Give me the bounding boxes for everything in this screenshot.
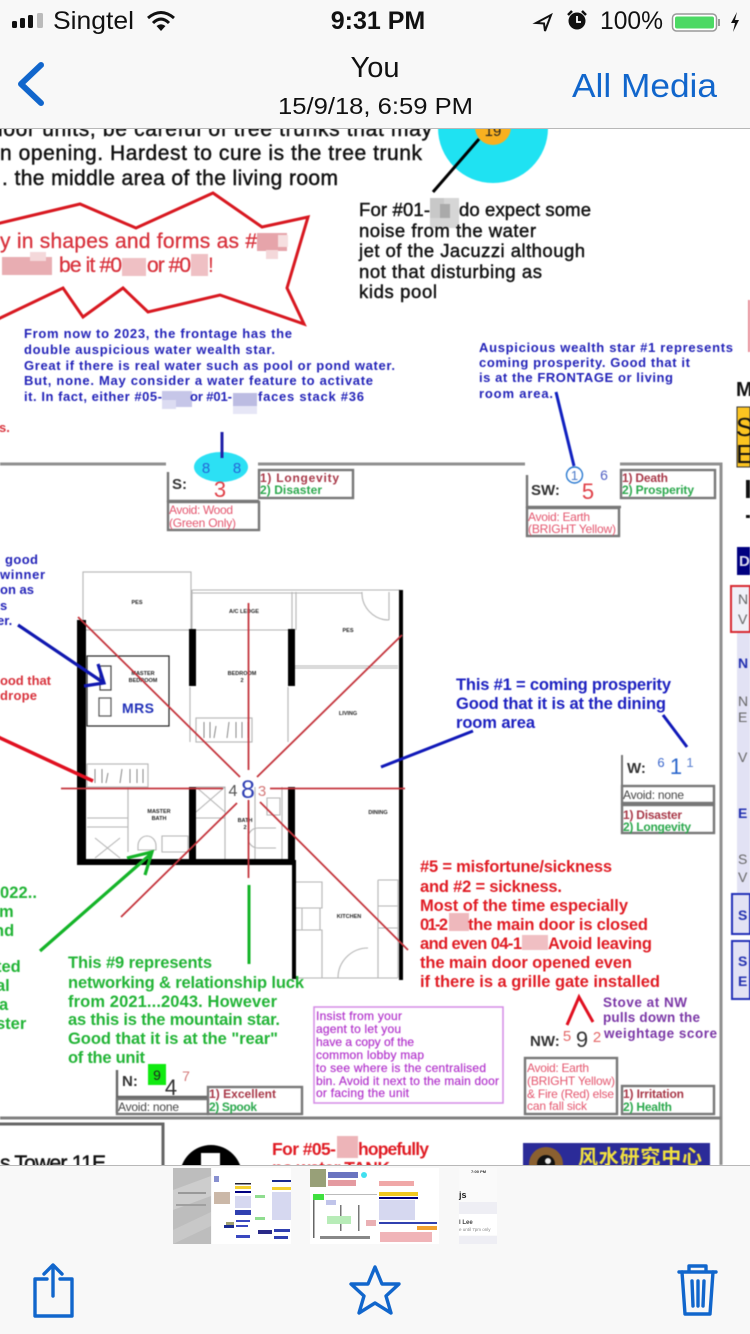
arrow: wealth star pointer: [556, 392, 574, 466]
room labels: [129, 600, 388, 920]
callout: red star burst: or #0: [147, 254, 191, 277]
thumbnail: current floor plan page: [310, 1168, 439, 1244]
arrow: red to wardrobe: [0, 737, 93, 781]
text block: stove note: pulls down the: [603, 1010, 700, 1025]
text block: mountain star note: This #9 represents: [68, 954, 212, 972]
panel: west star box: [622, 754, 714, 834]
text block: mountain star note: as this is the mountain star.: [68, 1011, 280, 1029]
panel: north star box: N:: [122, 1073, 138, 1090]
panel: west star box: 1) Disaster: [623, 808, 682, 822]
status: carrier: Singtel: [53, 7, 134, 35]
text block: auspicious wealth star: is at the FRONTAGE or living: [479, 370, 673, 385]
text block: jacuzzi note: jet of the Jacuzzi although: [358, 240, 585, 261]
thumbnail: message list: js: [458, 1190, 467, 1200]
callout: purple lobby map note: or facing the unit: [316, 1086, 410, 1100]
text block: auspicious wealth star: [479, 340, 733, 401]
nav date: 15/9/18, 6:59 PM: [278, 93, 473, 119]
thumbnail: message list: l Lee: [459, 1220, 473, 1226]
panel: south star box: 2) Disaster: [260, 483, 322, 497]
centre star numbers: 4: [229, 783, 238, 800]
room labels: BATH: [238, 818, 252, 824]
panel: north-west star box: NW:: [530, 1033, 560, 1050]
text block: mountain star note: networking & relationship luck: [68, 974, 305, 992]
room labels: PES: [131, 600, 143, 606]
panel: south star box: 3: [214, 477, 226, 502]
callout: purple lobby map note: common lobby map: [316, 1048, 424, 1062]
panel: clipped right column: V: [738, 869, 748, 885]
text block: frontage water star: From now to 2023, the frontage has the: [24, 326, 292, 341]
thumbnail: blurry photo: [173, 1168, 211, 1244]
text block: stove note: weightage score: [603, 1026, 717, 1041]
panel: west star box: Avoid: none: [623, 788, 684, 802]
panel: clipped right column: N: [738, 693, 748, 709]
panel: south-west star box: 1) Death: [622, 471, 668, 485]
text block: mountain star note: [68, 954, 305, 1067]
panel: clipped right column: N: [738, 655, 748, 671]
room labels: MASTER: [147, 809, 171, 815]
room labels: A/C LEDGE: [229, 609, 259, 615]
text block: misfortune warning: if there is a grille gate installed: [420, 973, 660, 991]
panel: north star box: 1) Excellent: [209, 1087, 276, 1101]
banner: feng shui research centre: 风水研究中心: [578, 1145, 702, 1169]
text block: stove note: [603, 995, 717, 1041]
room labels: BEDROOM: [129, 678, 158, 684]
panel: south-west star box: Avoid: Earth: [528, 510, 590, 524]
panel: north-west star box: 9: [576, 1027, 588, 1052]
text block: frontage water star: [24, 326, 395, 414]
text block: frontage water star: But, none. May consider a water feature to activate: [24, 373, 373, 388]
text fragments: left red note: ood that: [0, 673, 52, 688]
centre star numbers: 3: [258, 783, 266, 800]
icon: jacuzzi water circle: [433, 73, 548, 192]
panel: north-west star box: [525, 1027, 714, 1114]
panel: south star box: 1) Longevity: [260, 471, 339, 485]
panel: tower caption box: s Tower 11E: [0, 1152, 106, 1175]
panel: north-west star box: Avoid: Earth: [527, 1061, 589, 1075]
top navigation bar: [0, 0, 750, 129]
callout: purple lobby map note: have a copy of the: [316, 1035, 414, 1049]
icon: favourite star: [351, 1267, 399, 1313]
room labels: BATH: [152, 816, 166, 822]
room labels: 2: [240, 678, 244, 684]
text block: auspicious wealth star: room area.: [479, 386, 553, 401]
plan outlines: [83, 572, 400, 978]
text block: jacuzzi note: For #01-: [359, 199, 430, 220]
panel: south star box: (Green Only): [169, 516, 236, 530]
arrows: blue dining pointers: [381, 715, 687, 767]
floor plan frame: [0, 464, 721, 1165]
panel: south-west star box: 2) Prosperity: [622, 483, 694, 497]
banner: feng shui research centre: [523, 1143, 710, 1181]
panel: west star box: 2) Longevity: [623, 820, 691, 834]
panel: clipped right column: E: [738, 805, 747, 821]
text block: water tank note: For #05-: [272, 1139, 336, 1159]
panel: tower caption box: [0, 1124, 163, 1175]
room labels: LIVING: [339, 711, 357, 717]
red sector lines: [61, 603, 408, 950]
text fragments: left blue note: winner: [0, 567, 45, 582]
text block: misfortune warning: and even 04-1: [420, 935, 522, 953]
callout: red star burst: !: [208, 254, 214, 277]
callout: red star burst: be it #0: [59, 254, 122, 277]
text block: misfortune warning: Most of the time especially: [420, 897, 629, 915]
text block: misfortune warning: the main door is closed: [468, 916, 648, 934]
master bedroom marker: [87, 656, 169, 726]
text block: misfortune warning: #5 = misfortune/sickness: [420, 858, 612, 876]
text block: water tank note: [272, 1136, 429, 1178]
arrow: red caret: [567, 997, 593, 1025]
nav action: All Media: [572, 67, 718, 104]
text block: misfortune warning: Avoid leaving: [548, 935, 652, 953]
arrow: blue to master bed: [18, 625, 104, 686]
text block: jacuzzi note: not that disturbing as: [359, 261, 542, 282]
icon: share: [35, 1265, 72, 1316]
room labels: MASTER: [131, 671, 155, 677]
text block: stove note: Stove at NW: [603, 995, 687, 1010]
text block: frontage water star: faces stack #36: [258, 389, 364, 404]
panel: north-west star box: (BRIGHT Yellow): [527, 1074, 615, 1088]
nav title: You: [351, 52, 399, 84]
panel: clipped right column: S: [738, 907, 747, 923]
icon: trash: [679, 1266, 716, 1314]
text block: auspicious wealth star: Auspicious wealth star #1 represents: [479, 340, 733, 355]
callout: purple lobby map note: to see where is the centralised: [316, 1061, 486, 1075]
centre star numbers: 8: [241, 776, 255, 804]
icon: jacuzzi water circle: 19: [485, 123, 501, 140]
bottom toolbar: [0, 1165, 750, 1334]
callout: purple lobby map note: [314, 1007, 503, 1103]
panel: north-west star box: 1) Irritation: [623, 1087, 684, 1101]
panel: south-west star box: SW:: [531, 482, 560, 499]
panel: clipped right column: S: [738, 851, 747, 867]
panel: north-west star box: can fall sick: [527, 1099, 588, 1113]
text block: frontage water star: or #01-: [190, 389, 232, 404]
text block: auspicious wealth star: coming prosperity. Good that it: [479, 355, 691, 370]
floor plan: [61, 572, 408, 980]
text fragments: left blue note: [0, 552, 45, 628]
text block: mountain star note: of the unit: [68, 1049, 146, 1067]
panel: south-west star box: 6: [600, 467, 608, 483]
panel: clipped right column: V: [738, 749, 748, 765]
panel: south star box: 8: [202, 460, 210, 477]
room labels: DINING: [368, 810, 388, 816]
panel: west star box: 1: [670, 754, 682, 779]
room labels: 2: [243, 825, 247, 831]
panel: clipped right column: E: [738, 709, 747, 725]
text block: mountain star note: Good that it is at the "rear": [68, 1030, 278, 1048]
panel: west star box: 1: [686, 755, 694, 770]
arrow: green vertical line: [248, 885, 250, 964]
text fragments: left red note: [0, 673, 52, 703]
text block: dining prosperity: [456, 676, 672, 732]
text block: dining prosperity: room area: [456, 714, 536, 732]
callout: purple lobby map note: bin. Avoid it next to the main door: [316, 1074, 499, 1088]
text block: top advice: n opening. Hardest to cure is the tree trunk: [0, 142, 422, 165]
text fragments: left green note: [0, 884, 37, 1033]
callout: purple lobby map note: agent to let you: [316, 1022, 401, 1036]
panel: west star box: W:: [627, 760, 646, 777]
text block: water tank note: no water TANK: [272, 1158, 390, 1178]
plan walls: [77, 590, 403, 980]
panel: north star box: [117, 1064, 302, 1114]
panel: north-west star box: 2: [593, 1029, 601, 1046]
panel: south star box: S:: [172, 476, 187, 493]
text block: jacuzzi note: do expect some: [459, 199, 591, 220]
panel: south star box: 8: [233, 460, 241, 477]
panel: clipped right column: D: [739, 553, 750, 570]
status: time: 9:31 PM: [331, 7, 425, 35]
thumbnail: message list: e until 7pm only: [459, 1227, 491, 1232]
panel: south-west star box: 1: [571, 468, 578, 483]
text block: water tank note: hopefully: [358, 1139, 429, 1159]
panel: clipped right column: S: [738, 953, 747, 969]
icon: alarm clock: [568, 11, 586, 30]
text block: top advice: . the middle area of the living room: [2, 167, 338, 190]
room labels: PES: [342, 628, 354, 634]
panel: north star box: Avoid: none: [118, 1100, 179, 1114]
icon: back chevron: [21, 65, 41, 103]
text block: misfortune warning: the main door opened even: [420, 954, 632, 972]
panel: south-west star box: [527, 467, 715, 536]
text block: misfortune warning: [420, 858, 660, 991]
panel: north star box: 4: [165, 1075, 177, 1100]
text block: dining prosperity: Good that it is at the dining: [456, 695, 666, 713]
arrow: green to master bath: [40, 852, 152, 951]
panel: south star box: [168, 432, 353, 530]
panel: south-west star box: (BRIGHT Yellow): [528, 522, 616, 536]
text block: frontage water star: double auspicious water wealth star.: [24, 342, 275, 357]
text block: frontage water star: Great if there is real water such as pool or pond water.: [24, 358, 395, 373]
text block: top advice: loor units, be careful of tree trunks that may: [0, 118, 432, 141]
master bedroom marker: MRS: [122, 700, 154, 716]
text fragments: left red note: drope: [0, 688, 37, 703]
panel: north-west star box: & Fire (Red) else: [527, 1087, 614, 1101]
text fragments: left green note: 022..: [0, 884, 37, 902]
text block: top advice: [0, 118, 432, 190]
thumbnail: message list: 7:00 PM: [471, 1169, 487, 1174]
callout: purple lobby map note: Insist from your: [316, 1009, 402, 1023]
icon: wifi: [148, 12, 174, 31]
text fragments: left blue note: on as: [0, 582, 34, 597]
icon: location arrow: [536, 15, 551, 31]
room labels: BEDROOM: [228, 671, 257, 677]
panel: south star box: Avoid: Wood: [169, 503, 233, 517]
text block: misfortune warning: 01-2: [420, 916, 448, 934]
panel: north star box: 7: [182, 1068, 190, 1084]
text block: jacuzzi note: [358, 198, 591, 302]
panel: clipped right column: [731, 300, 750, 999]
status: battery percent: 100%: [600, 7, 663, 35]
panel: north star box: 2) Spook: [209, 1100, 257, 1114]
room labels: KITCHEN: [337, 914, 361, 920]
thumbnail: document pages: [212, 1168, 291, 1244]
status: signal bars: [12, 13, 43, 28]
panel: clipped right column: E: [738, 973, 747, 989]
panel: north-west star box: 2) Health: [623, 1100, 672, 1114]
callout: red star burst: y in shapes and forms as #: [0, 230, 257, 253]
panel: clipped right column: V: [738, 611, 748, 627]
centre star numbers: [229, 776, 266, 804]
thumbnail: message list: [458, 1168, 497, 1244]
icon: charging bolt: [731, 12, 739, 32]
callout: red star burst: [0, 193, 308, 324]
panel: north star box: 9: [153, 1067, 161, 1083]
text block: jacuzzi note: noise from the water: [359, 220, 536, 241]
panel: west star box: 6: [657, 755, 665, 770]
text block: frontage water star: it. In fact, either #05-: [24, 389, 162, 404]
text fragments: left blue note: good: [5, 552, 38, 567]
panel: clipped right column: N: [738, 591, 748, 607]
text block: dining prosperity: This #1 = coming prosperity: [456, 676, 672, 694]
panel: north-west star box: 5: [563, 1028, 571, 1045]
icon: black circle sign: [180, 1145, 242, 1207]
text block: misfortune warning: and #2 = sickness.: [420, 878, 562, 896]
text block: jacuzzi note: kids pool: [359, 281, 437, 302]
icon: battery: [672, 14, 720, 31]
panel: south-west star box: 5: [582, 479, 594, 504]
text block: mountain star note: from 2021...2043. However: [68, 993, 278, 1011]
